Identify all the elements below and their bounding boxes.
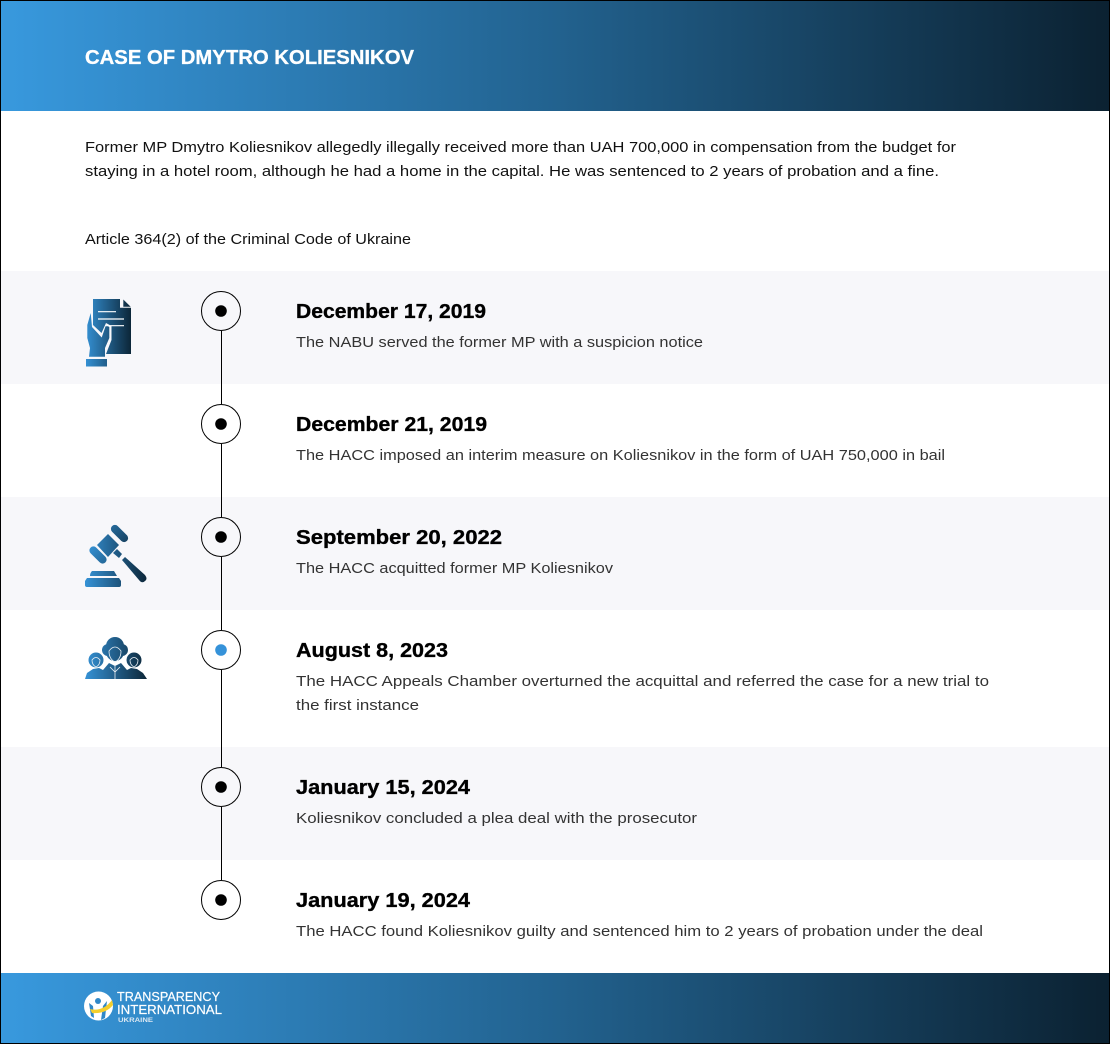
timeline event: January 19, 2024: The HACC found Koliesnikov guilty and sentenced him to 2 years of probation under the deal <box>296 923 983 940</box>
row bands <box>0 271 1110 860</box>
timeline event: December 21, 2019: December 21, 2019 <box>296 414 487 436</box>
timeline event: September 20, 2022: The HACC acquitted former MP Koliesnikov <box>296 560 614 577</box>
timeline axis <box>221 331 222 880</box>
intro text: Former MP Dmytro Koliesnikov allegedly illegally received more than UAH 700,000 in compensation from the budget for <box>85 139 956 156</box>
timeline event: December 21, 2019: The HACC imposed an interim measure on Koliesnikov in the form of UAH 750,000 in bail <box>296 447 945 464</box>
timeline event: January 19, 2024: January 19, 2024 <box>296 890 471 912</box>
timeline event: January 15, 2024: January 15, 2024 <box>296 777 471 799</box>
footer banner <box>0 973 1110 1044</box>
intro text <box>85 139 956 180</box>
timeline event: December 21, 2019 <box>202 404 945 464</box>
icon: hand holding document <box>86 299 131 366</box>
intro text: staying in a hotel room, although he had a home in the capital. He was sentenced to 2 years of probation and a fine. <box>85 163 939 180</box>
header banner <box>0 0 1110 111</box>
timeline event: September 20, 2022: September 20, 2022 <box>296 527 502 549</box>
logo: Transparency International Ukraine <box>84 990 222 1024</box>
timeline event: December 17, 2019: The NABU served the former MP with a suspicion notice <box>296 334 703 351</box>
timeline event: January 15, 2024: Koliesnikov concluded a plea deal with the prosecutor <box>296 810 697 827</box>
legal article reference: Article 364(2) of the Criminal Code of Ukraine <box>85 231 411 248</box>
logo: Transparency International Ukraine: UKRAINE <box>118 1017 154 1024</box>
title: CASE OF DMYTRO KOLIESNIKOV <box>85 47 415 69</box>
timeline event: August 8, 2023: August 8, 2023 <box>296 640 448 662</box>
timeline event: August 8, 2023: The HACC Appeals Chamber overturned the acquittal and referred the case for a new trial to <box>296 673 989 690</box>
logo: Transparency International Ukraine: TRANSPARENCY <box>117 990 221 1004</box>
timeline event: August 8, 2023: the first instance <box>296 697 419 714</box>
logo: Transparency International Ukraine: INTERNATIONAL <box>117 1002 222 1017</box>
timeline event: September 20, 2022 <box>202 518 614 577</box>
timeline event: December 17, 2019: December 17, 2019 <box>296 301 486 323</box>
icon: group of judges <box>85 637 147 679</box>
timeline event: December 17, 2019 <box>202 292 703 351</box>
timeline event: January 15, 2024 <box>202 768 697 827</box>
icon: judge gavel <box>85 523 146 587</box>
timeline event: August 8, 2023 <box>202 630 989 714</box>
timeline event: January 19, 2024 <box>202 880 983 940</box>
